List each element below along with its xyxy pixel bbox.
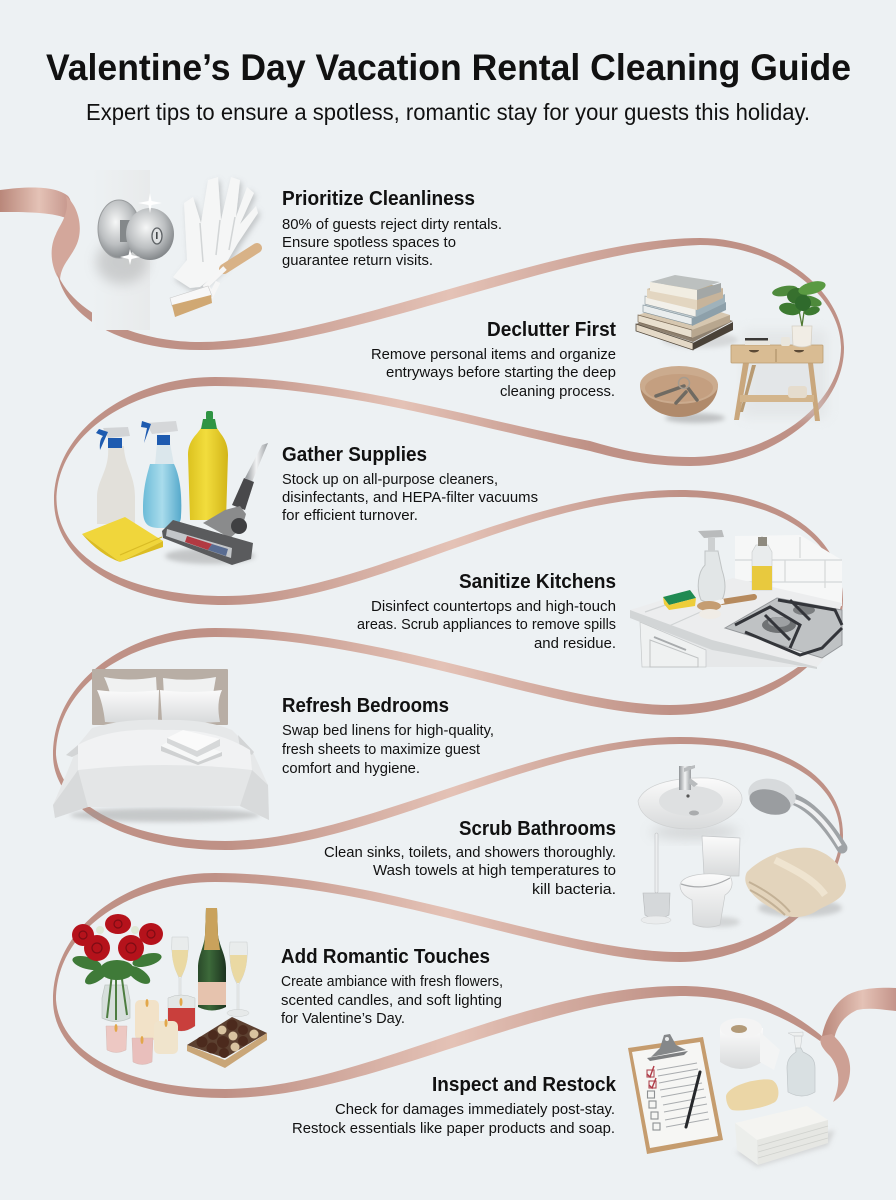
heading: Sanitize Kitchens xyxy=(459,571,616,593)
body text: fresh sheets to maximize guest xyxy=(282,742,480,758)
heading: Inspect and Restock xyxy=(432,1074,617,1096)
heading: Scrub Bathrooms xyxy=(459,818,616,840)
heading: Add Romantic Touches xyxy=(281,946,490,968)
body text xyxy=(371,347,616,400)
body text: Swap bed linens for high-quality, xyxy=(282,723,494,739)
body text: Create ambiance with fresh flowers, xyxy=(281,974,503,990)
body text: areas. Scrub appliances to remove spills xyxy=(357,617,616,633)
body text: for Valentine’s Day. xyxy=(281,1011,405,1027)
step 8: Inspect and Restock xyxy=(292,1018,835,1167)
title: Valentine’s Day Vacation Rental Cleaning Guide xyxy=(46,47,851,88)
heading: Prioritize Cleanliness xyxy=(282,188,475,210)
body text: kill bacteria. xyxy=(532,882,616,898)
heading: Gather Supplies xyxy=(282,444,427,466)
body text xyxy=(292,1102,615,1137)
body text: Restock essentials like paper products and soap. xyxy=(292,1121,615,1137)
body text xyxy=(324,845,616,898)
body text: guarantee return visits. xyxy=(282,253,433,269)
icon: roses, candles, champagne and chocolates xyxy=(71,908,267,1068)
step 5: Refresh Bedrooms xyxy=(53,669,494,822)
icon: spray bottles, detergent, towel and vacuum xyxy=(82,411,268,565)
body text: Clean sinks, toilets, and showers thoroughly. xyxy=(324,845,616,861)
heading: Declutter First xyxy=(487,319,616,341)
step 7: Add Romantic Touches xyxy=(71,908,503,1068)
step 4: Sanitize Kitchens xyxy=(357,530,842,669)
body text xyxy=(281,974,503,1027)
subtitle: Expert tips to ensure a spotless, romantic stay for your guests this holiday. xyxy=(86,99,810,125)
body text: Remove personal items and organize xyxy=(371,347,616,363)
body text: disinfectants, and HEPA-filter vacuums xyxy=(282,490,538,506)
body text xyxy=(282,217,502,269)
icon: made bed with folded towels xyxy=(53,669,269,822)
body text: Check for damages immediately post-stay. xyxy=(335,1102,615,1118)
icon: clipboard, toilet paper, soap, pump bottle and napkins xyxy=(628,1018,835,1167)
body text: entryways before starting the deep xyxy=(386,365,616,381)
body text: Wash towels at high temperatures to xyxy=(373,863,616,879)
body text: Disinfect countertops and high-touch xyxy=(371,599,616,615)
icon: kitchen counter with stove xyxy=(630,530,842,669)
body text: and residue. xyxy=(534,636,616,652)
body text xyxy=(357,599,616,652)
step 2: Declutter First xyxy=(371,275,827,423)
step 1: Prioritize Cleanliness xyxy=(92,170,502,330)
step 3: Gather Supplies xyxy=(82,411,538,565)
heading: Refresh Bedrooms xyxy=(282,695,449,717)
body text xyxy=(282,723,494,777)
body text: Stock up on all-purpose cleaners, xyxy=(282,472,498,488)
ribbon: rose gold winding path xyxy=(0,188,896,1102)
body text: scented candles, and soft lighting xyxy=(281,993,502,1009)
icon: sink, shower head, toilet, brush and towel xyxy=(638,765,846,927)
icon: door knob, glove and brush xyxy=(92,170,258,330)
body text xyxy=(282,472,538,524)
icon: books, key bowl and console table xyxy=(636,275,827,423)
body text: comfort and hygiene. xyxy=(282,761,420,777)
body text: for efficient turnover. xyxy=(282,508,418,524)
body text: cleaning process. xyxy=(500,384,615,400)
body text: Ensure spotless spaces to xyxy=(282,235,456,251)
step 6: Scrub Bathrooms xyxy=(324,765,846,927)
body text: 80% of guests reject dirty rentals. xyxy=(282,217,502,233)
